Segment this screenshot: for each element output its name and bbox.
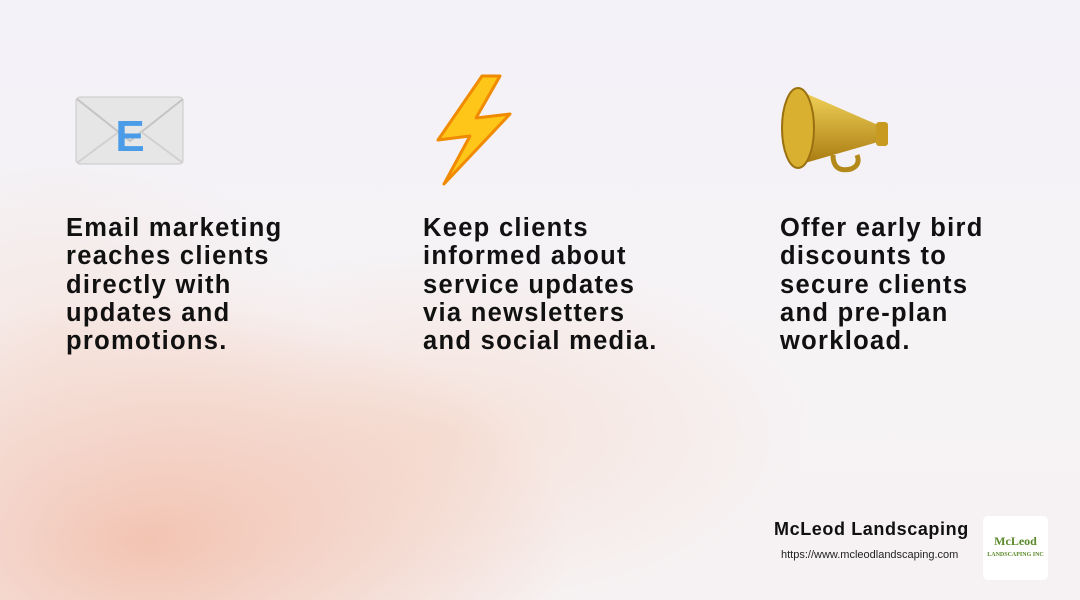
text: column 1: Email marketing [66,214,282,242]
text: column 2 [423,214,658,355]
text: column 2: via newsletters [423,299,625,327]
text: column 1: reaches clients [66,242,270,270]
text: column 2: informed about [423,242,627,270]
text: column 3: and pre-plan [780,299,949,327]
icon: envelope with E [76,96,184,164]
text: column 1: updates and [66,299,230,327]
text: column 2: and social media. [423,327,658,355]
text: column 3: discounts to [780,242,947,270]
text: column 3: Offer early bird [780,214,984,242]
text: column 3: secure clients [780,271,968,299]
text: column 3: workload. [780,327,911,355]
text: column 3 [780,214,984,355]
text: column 1: directly with [66,271,232,299]
icon: lightning [436,74,512,186]
icon: envelope with E: E [115,112,145,161]
footer: logo: McLeod [994,534,1037,548]
text: column 2: Keep clients [423,214,589,242]
footer: logo: LANDSCAPING INC [987,552,1044,558]
text: column 1 [66,214,282,355]
icon: megaphone [781,87,888,172]
footer: brand name: McLeod Landscaping [774,519,969,539]
text: column 2: service updates [423,271,635,299]
text: column 1: promotions. [66,327,228,355]
footer: logo [983,516,1048,580]
footer: url: https://www.mcleodlandscaping.com [781,549,958,561]
